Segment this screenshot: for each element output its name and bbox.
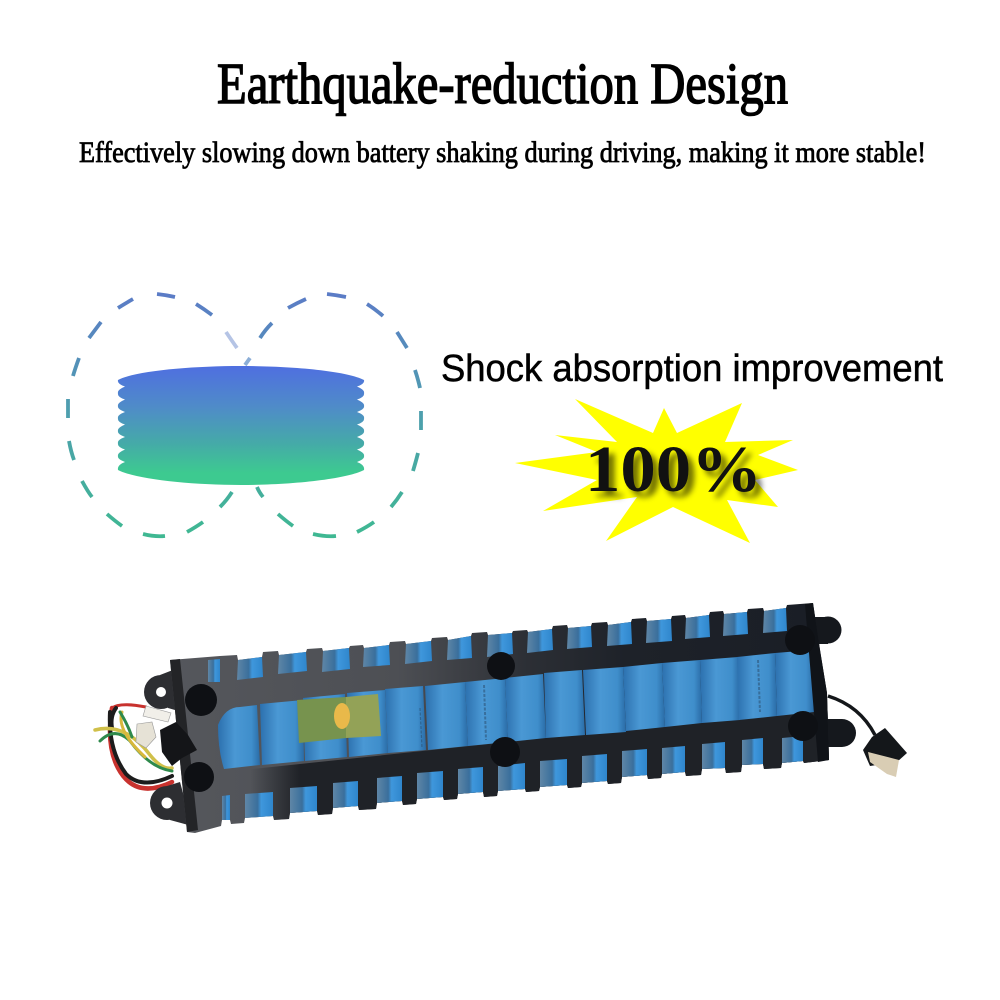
100% shadow: 100% <box>591 439 768 512</box>
darker lower strap <box>258 710 829 820</box>
top notches <box>208 608 787 682</box>
right cable <box>828 696 875 735</box>
bottom notches <box>222 736 803 820</box>
plug tip <box>868 752 899 777</box>
green insulation tape <box>297 697 346 743</box>
100% text: 100% <box>585 433 762 506</box>
ribbed cylinder <box>118 366 364 485</box>
left end strip <box>170 659 198 832</box>
title: Earthquake-reduction Design <box>217 51 788 116</box>
white connectors <box>143 706 171 722</box>
left wiring harness <box>95 705 172 788</box>
black glue at wire exit <box>160 722 197 766</box>
right mounting ears <box>812 616 856 747</box>
icon: shock absorber with dashed figure-eight <box>68 294 421 536</box>
pack body <box>170 603 829 833</box>
label: shock absorption improvement: Shock absorption improvement <box>441 348 943 390</box>
tape right half <box>346 694 381 738</box>
cell print marks <box>420 660 760 748</box>
yellow star <box>515 399 798 543</box>
callout: 100% starburst <box>515 399 798 543</box>
right end strip <box>805 603 829 762</box>
dashed figure-eight ring <box>68 294 421 536</box>
yellow solder blob <box>334 703 350 729</box>
ear holes <box>156 687 172 808</box>
cells, centre row <box>218 650 814 769</box>
black rubber pads <box>184 625 818 792</box>
photo: scooter battery pack <box>95 603 907 835</box>
left mounting ears <box>144 668 192 826</box>
right plug <box>863 728 907 766</box>
